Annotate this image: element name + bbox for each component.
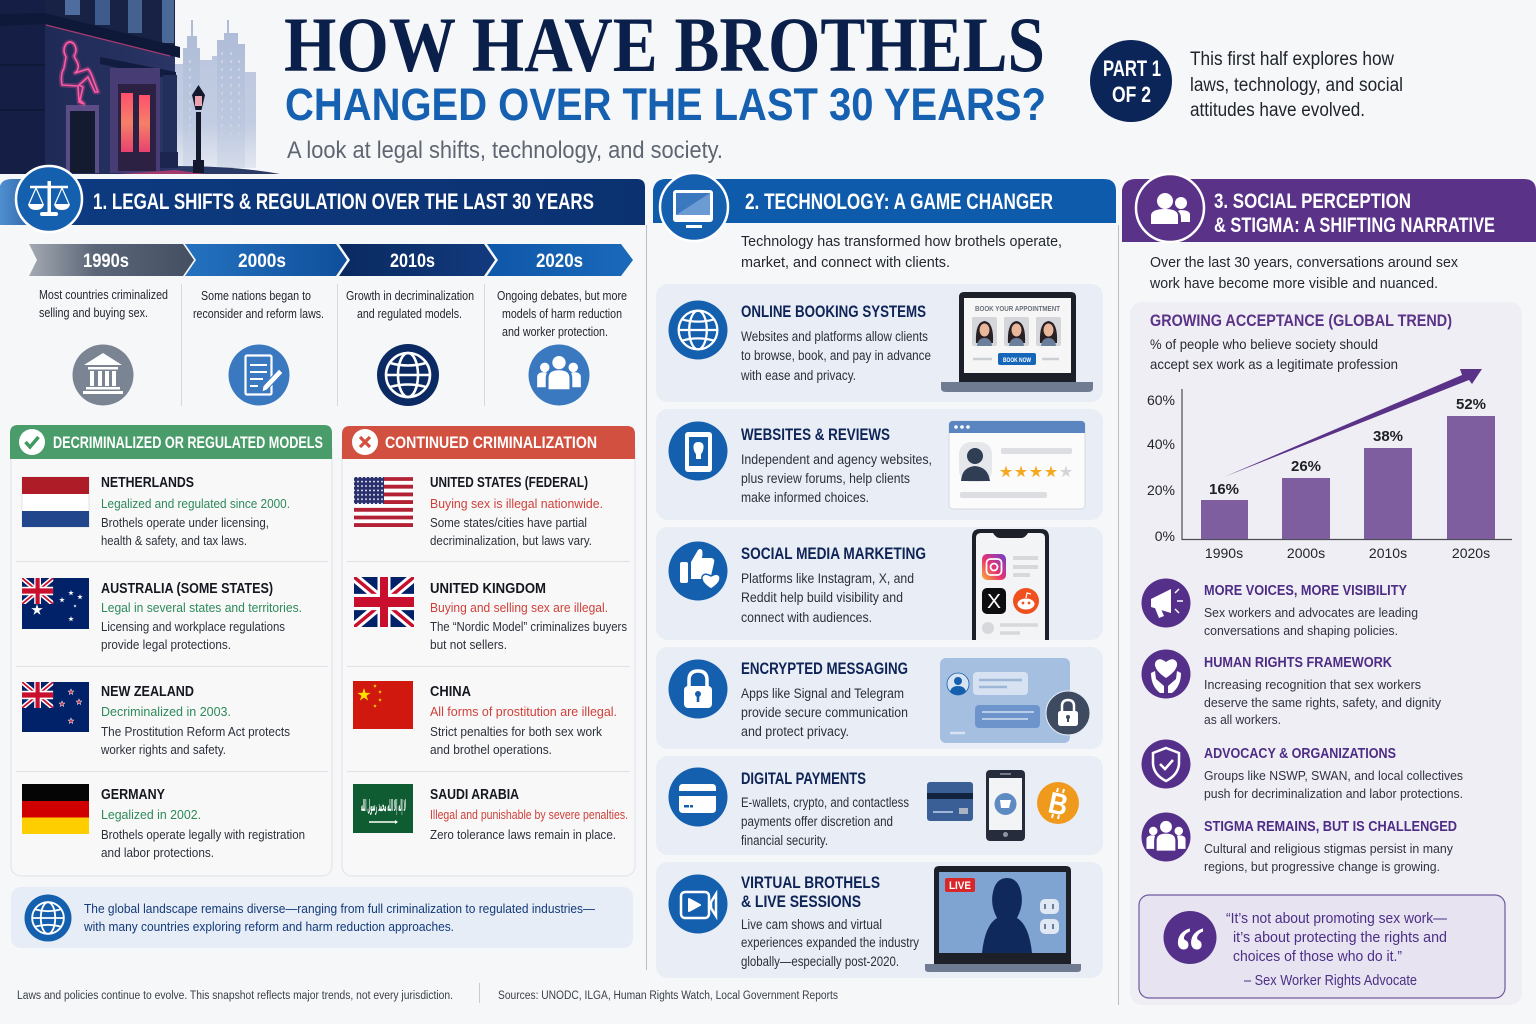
illustration: card, phone and bitcoin: B — [1045, 786, 1071, 823]
panel: social perception — [1122, 174, 1536, 1005]
item: human rights framework: as all workers. — [1204, 712, 1281, 727]
entry: United States: Some states/cities have partial — [430, 516, 587, 530]
bar chart: growing acceptance: 0% — [1155, 528, 1175, 544]
panel: decriminalized or regulated models — [10, 425, 332, 876]
icon: globe — [377, 344, 439, 406]
entry: United States: decriminalization, but laws vary. — [430, 534, 592, 548]
quote box: “It’s not about promoting sex work— — [1226, 911, 1447, 927]
item: more voices — [1142, 578, 1418, 638]
panel: legal shifts — [0, 166, 645, 948]
entry: China: CHINA — [430, 684, 471, 700]
flag: China — [353, 681, 413, 729]
card: digital payments: DIGITAL PAYMENTS — [741, 770, 866, 788]
section 3 header band — [1122, 179, 1536, 242]
flag: United States — [354, 477, 413, 527]
entry: New Zealand: worker rights and safety. — [100, 743, 226, 757]
card: digital payments — [656, 756, 1103, 855]
entry: Netherlands: Legalized and regulated since 2000. — [101, 497, 290, 511]
item: advocacy and organizations: ADVOCACY & ORGANIZATIONS — [1204, 746, 1396, 762]
item: advocacy and organizations — [1142, 740, 1463, 801]
illustration: phone with social apps — [972, 529, 1049, 640]
item: more voices: conversations and shaping policies. — [1204, 623, 1398, 638]
text: 1990s description: selling and buying sex. — [39, 306, 148, 320]
illustration: review card with star rating — [949, 421, 1085, 509]
entry: Netherlands: Brothels operate under licensing, — [101, 516, 269, 530]
part description: attitudes have evolved. — [1190, 100, 1365, 121]
bar chart: growing acceptance: 2010s — [1369, 545, 1407, 561]
text: 2020s description: Ongoing debates, but more — [497, 289, 627, 303]
badge: part 1 of 2 — [1090, 40, 1172, 122]
card: virtual brothels and live sessions: VIRTUAL BROTHELS — [741, 874, 880, 892]
bar chart: growing acceptance: 52% — [1456, 396, 1486, 413]
entry: Germany — [101, 787, 305, 860]
card: digital payments: E-wallets, crypto, and contactless — [741, 795, 909, 810]
card: social media marketing: SOCIAL MEDIA MARKETING — [741, 545, 926, 563]
illustration: chat window with padlock — [940, 658, 1090, 743]
entry: United States — [430, 475, 603, 548]
quote box: – Sex Worker Rights Advocate — [1244, 973, 1417, 989]
footer note: Laws and policies continue to evolve. This snapshot reflects major trends, not every jurisdiction. — [17, 990, 453, 1002]
text: 2020s description — [497, 289, 627, 339]
quote box: “ — [1175, 914, 1205, 991]
quote box: choices of those who do it.” — [1233, 949, 1402, 965]
text: 2000s description — [193, 289, 324, 321]
illustration: laptop booking screen — [941, 292, 1093, 392]
section 3 intro: Over the last 30 years, conversations around sex — [1150, 254, 1458, 271]
card: websites and reviews — [656, 409, 1103, 520]
bar chart: growing acceptance: 60% — [1147, 392, 1175, 408]
icon: scales of justice — [16, 166, 82, 232]
section 3 intro: work have become more visible and nuanced. — [1149, 275, 1438, 292]
entry: Australia: AUSTRALIA (SOME STATES) — [101, 581, 273, 597]
bar chart: growing acceptance: 16% — [1209, 481, 1239, 498]
item: more voices: Sex workers and advocates are leading — [1204, 605, 1418, 620]
callout: global landscape: The global landscape remains diverse—ranging from full criminalization to regulated industries— — [84, 901, 595, 916]
entry: United Kingdom — [430, 581, 627, 652]
text: 1990s description — [39, 288, 168, 320]
entry: China — [430, 684, 617, 757]
card: virtual brothels and live sessions: & LIVE SESSIONS — [741, 893, 861, 911]
entry: New Zealand — [100, 684, 290, 757]
card: online booking systems: Websites and platforms allow clients — [741, 329, 928, 344]
entry: Australia — [101, 581, 302, 652]
panel: continued criminalization — [342, 426, 635, 876]
entry: New Zealand: Decriminalized in 2003. — [101, 705, 231, 719]
section 2 intro — [741, 233, 1062, 271]
entry: Netherlands — [101, 475, 290, 548]
entry: Germany: Legalized in 2002. — [101, 808, 201, 822]
timeline: decade arrows: 2020s — [536, 250, 583, 272]
card: digital payments: financial security. — [741, 833, 828, 848]
section 2 intro: Technology has transformed how brothels operate, — [741, 233, 1062, 250]
bar chart: growing acceptance: 26% — [1291, 458, 1321, 475]
card: websites and reviews: WEBSITES & REVIEWS — [741, 426, 890, 444]
part description: laws, technology, and social — [1190, 75, 1403, 96]
heading: decriminalized models — [10, 425, 332, 459]
card: encrypted messaging: Apps like Signal and Telegram — [741, 686, 904, 701]
flag: Australia — [22, 578, 89, 629]
arrow: upward trend — [1224, 369, 1482, 477]
card: websites and reviews: plus review forums, help clients — [741, 471, 910, 486]
entry: United Kingdom: Buying and selling sex are illegal. — [430, 601, 608, 615]
bar chart: growing acceptance: 2000s — [1287, 545, 1325, 561]
part description: This first half explores how — [1190, 49, 1394, 70]
callout: global landscape — [11, 887, 633, 948]
bar chart: growing acceptance: 20% — [1147, 482, 1175, 498]
flag: Netherlands — [22, 477, 89, 527]
badge: part 1 of 2: PART 1 — [1103, 56, 1161, 81]
panel: technology — [653, 173, 1116, 978]
text: 1990s description: Most countries criminalized — [39, 288, 168, 302]
section 1 header band: 1. LEGAL SHIFTS & REGULATION OVER THE LAST 30 YEARS — [93, 189, 594, 214]
icon: people group — [528, 344, 590, 406]
card: encrypted messaging — [656, 647, 1103, 749]
entry: New Zealand: The Prostitution Reform Act protects — [101, 725, 290, 739]
card: digital payments: payments offer discretion and — [741, 814, 893, 829]
card: encrypted messaging: ENCRYPTED MESSAGING — [741, 660, 908, 678]
entry: Netherlands: health & safety, and tax laws. — [101, 534, 247, 548]
part description — [1190, 49, 1403, 121]
entry: United States: Buying sex is illegal nationwide. — [430, 497, 603, 511]
timeline: decade arrows — [29, 244, 633, 276]
section 3 intro — [1149, 254, 1458, 292]
text: 2000s description: reconsider and reform laws. — [193, 307, 324, 321]
card: online booking systems — [656, 284, 1103, 402]
card: social media marketing — [656, 527, 1103, 640]
bar chart: growing acceptance: 38% — [1373, 428, 1403, 445]
flag: New Zealand — [22, 682, 89, 732]
footer sources: Sources: UNODC, ILGA, Human Rights Watch, Local Government Reports — [498, 990, 838, 1002]
quote box — [1139, 895, 1505, 998]
heading: continued criminalization: CONTINUED CRIMINALIZATION — [385, 433, 597, 452]
chart title: accept sex work as a legitimate profession — [1150, 356, 1398, 372]
entry: United Kingdom: The “Nordic Model” criminalizes buyers — [430, 620, 627, 634]
heading: decriminalized models: DECRIMINALIZED OR REGULATED MODELS — [53, 433, 323, 452]
section 2 intro: market, and connect with clients. — [741, 254, 950, 271]
icon: document and pen — [228, 344, 290, 406]
entry: China: and brothel operations. — [430, 743, 552, 757]
bar chart: growing acceptance: 40% — [1147, 436, 1175, 452]
callout: global landscape: with many countries exploring reform and harm reduction approaches. — [83, 919, 454, 934]
card: virtual brothels and live sessions: experiences expanded the industry — [741, 935, 919, 950]
item: stigma remains: STIGMA REMAINS, BUT IS CHALLENGED — [1204, 819, 1457, 835]
flag: Germany — [22, 784, 89, 834]
card: encrypted messaging: and protect privacy. — [741, 724, 849, 739]
entry: New Zealand: NEW ZEALAND — [101, 684, 194, 700]
text: 2010s description: Growth in decriminalization — [346, 289, 474, 303]
entry: China: All forms of prostitution are illegal. — [430, 705, 617, 719]
item: stigma remains: Cultural and religious stigmas persist in many — [1204, 841, 1453, 856]
card: online booking systems: ONLINE BOOKING SYSTEMS — [741, 303, 926, 321]
text: 2010s description: and regulated models. — [357, 307, 462, 321]
illustration: brothel street scene with neon sign and lamp — [0, 0, 280, 174]
timeline: decade arrows: 2010s — [390, 250, 435, 272]
timeline: decade arrows: 1990s — [83, 250, 129, 272]
text: 2010s description — [346, 289, 474, 321]
flag: Saudi Arabia — [353, 784, 413, 833]
item: human rights framework: deserve the same rights, safety, and dignity — [1204, 695, 1441, 710]
bar chart: growing acceptance — [1147, 369, 1512, 561]
icon: government building — [72, 344, 134, 406]
card: social media marketing: connect with audiences. — [741, 610, 872, 625]
entry: Saudi Arabia: Zero tolerance laws remain in place. — [430, 828, 616, 842]
entry: Australia: Licensing and workplace regulations — [101, 620, 285, 634]
item: stigma remains: regions, but progressive change is growing. — [1204, 859, 1440, 874]
chart title: GROWING ACCEPTANCE (GLOBAL TREND) — [1150, 311, 1452, 330]
entry: Germany: GERMANY — [101, 787, 165, 803]
section 2 header band: 2. TECHNOLOGY: A GAME CHANGER — [745, 189, 1053, 214]
bar chart: growing acceptance: 2020s — [1452, 545, 1490, 561]
illustration: laptop with live stream: LIVE — [949, 880, 971, 892]
illustration: card, phone and bitcoin — [927, 770, 1079, 841]
icon: computer monitor — [660, 173, 728, 241]
entry: Netherlands: NETHERLANDS — [101, 475, 194, 491]
panel: continued criminalization: لا إله إلا الله محمد رسول الله — [361, 796, 406, 815]
card: online booking systems: to browse, book, and pay in advance — [741, 348, 931, 363]
badge: part 1 of 2: OF 2 — [1112, 82, 1151, 107]
item: human rights framework: HUMAN RIGHTS FRAMEWORK — [1204, 655, 1392, 671]
bar chart: growing acceptance: 1990s — [1205, 545, 1243, 561]
item: advocacy and organizations: push for decriminalization and labor protections. — [1204, 786, 1463, 801]
illustration: laptop booking screen: BOOK NOW — [1003, 357, 1032, 364]
chart title: % of people who believe society should — [1150, 336, 1378, 352]
card: websites and reviews: Independent and agency websites, — [741, 452, 932, 467]
illustration: laptop booking screen: BOOK YOUR APPOINTMENT — [975, 306, 1061, 313]
illustration: laptop with live stream — [925, 866, 1081, 972]
illustration: phone with social apps: X — [987, 591, 1001, 613]
card: virtual brothels and live sessions — [656, 862, 1103, 978]
entry: Germany: and labor protections. — [101, 846, 214, 860]
entry: Germany: Brothels operate legally with registration — [101, 828, 305, 842]
item: advocacy and organizations: Groups like NSWP, SWAN, and local collectives — [1204, 768, 1463, 783]
item: more voices: MORE VOICES, MORE VISIBILITY — [1204, 583, 1407, 599]
card: online booking systems: with ease and privacy. — [740, 368, 856, 383]
section 2 header band — [653, 179, 1116, 223]
entry: Saudi Arabia: SAUDI ARABIA — [430, 787, 519, 803]
subtitle: CHANGED OVER THE LAST 30 YEARS? — [285, 79, 1046, 130]
text: 2000s description: Some nations began to — [201, 289, 311, 303]
entry: Australia: Legal in several states and territories. — [101, 601, 302, 615]
entry: Saudi Arabia: Illegal and punishable by severe penalties. — [430, 808, 628, 822]
item: human rights framework — [1142, 650, 1441, 727]
heading: continued criminalization — [342, 426, 635, 459]
card: websites and reviews: make informed choices. — [741, 490, 869, 505]
card: virtual brothels and live sessions: Live cam shows and virtual — [741, 917, 882, 932]
entry: United States: UNITED STATES (FEDERAL) — [430, 475, 588, 491]
text: 2020s description: models of harm reduction — [502, 307, 622, 321]
entry: United Kingdom: UNITED KINGDOM — [430, 581, 546, 597]
card: encrypted messaging: provide secure communication — [741, 705, 908, 720]
icon: two people — [1136, 174, 1204, 242]
timeline: decade arrows: 2000s — [238, 250, 286, 272]
section 3 header band: 3. SOCIAL PERCEPTION — [1214, 190, 1411, 213]
entry: United Kingdom: but not sellers. — [430, 638, 507, 652]
card: virtual brothels and live sessions: globally—especially post-2020. — [741, 954, 899, 969]
text: 2020s description: and worker protection. — [502, 325, 608, 339]
item: stigma remains — [1142, 812, 1457, 874]
section 1 header band — [0, 179, 645, 225]
flag: United Kingdom — [354, 577, 414, 627]
quote box: it’s about protecting the rights and — [1233, 930, 1447, 946]
card: social media marketing: Reddit help build visibility and — [741, 590, 903, 605]
tagline: A look at legal shifts, technology, and society. — [287, 137, 723, 164]
title: HOW HAVE BROTHELS — [284, 1, 1045, 88]
chart title — [1150, 311, 1452, 372]
entry: China: Strict penalties for both sex work — [430, 725, 603, 739]
item: human rights framework: Increasing recognition that sex workers — [1204, 677, 1421, 692]
entry: Australia: provide legal protections. — [101, 638, 231, 652]
entry: Saudi Arabia — [430, 787, 628, 842]
card: social media marketing: Platforms like Instagram, X, and — [741, 571, 914, 586]
